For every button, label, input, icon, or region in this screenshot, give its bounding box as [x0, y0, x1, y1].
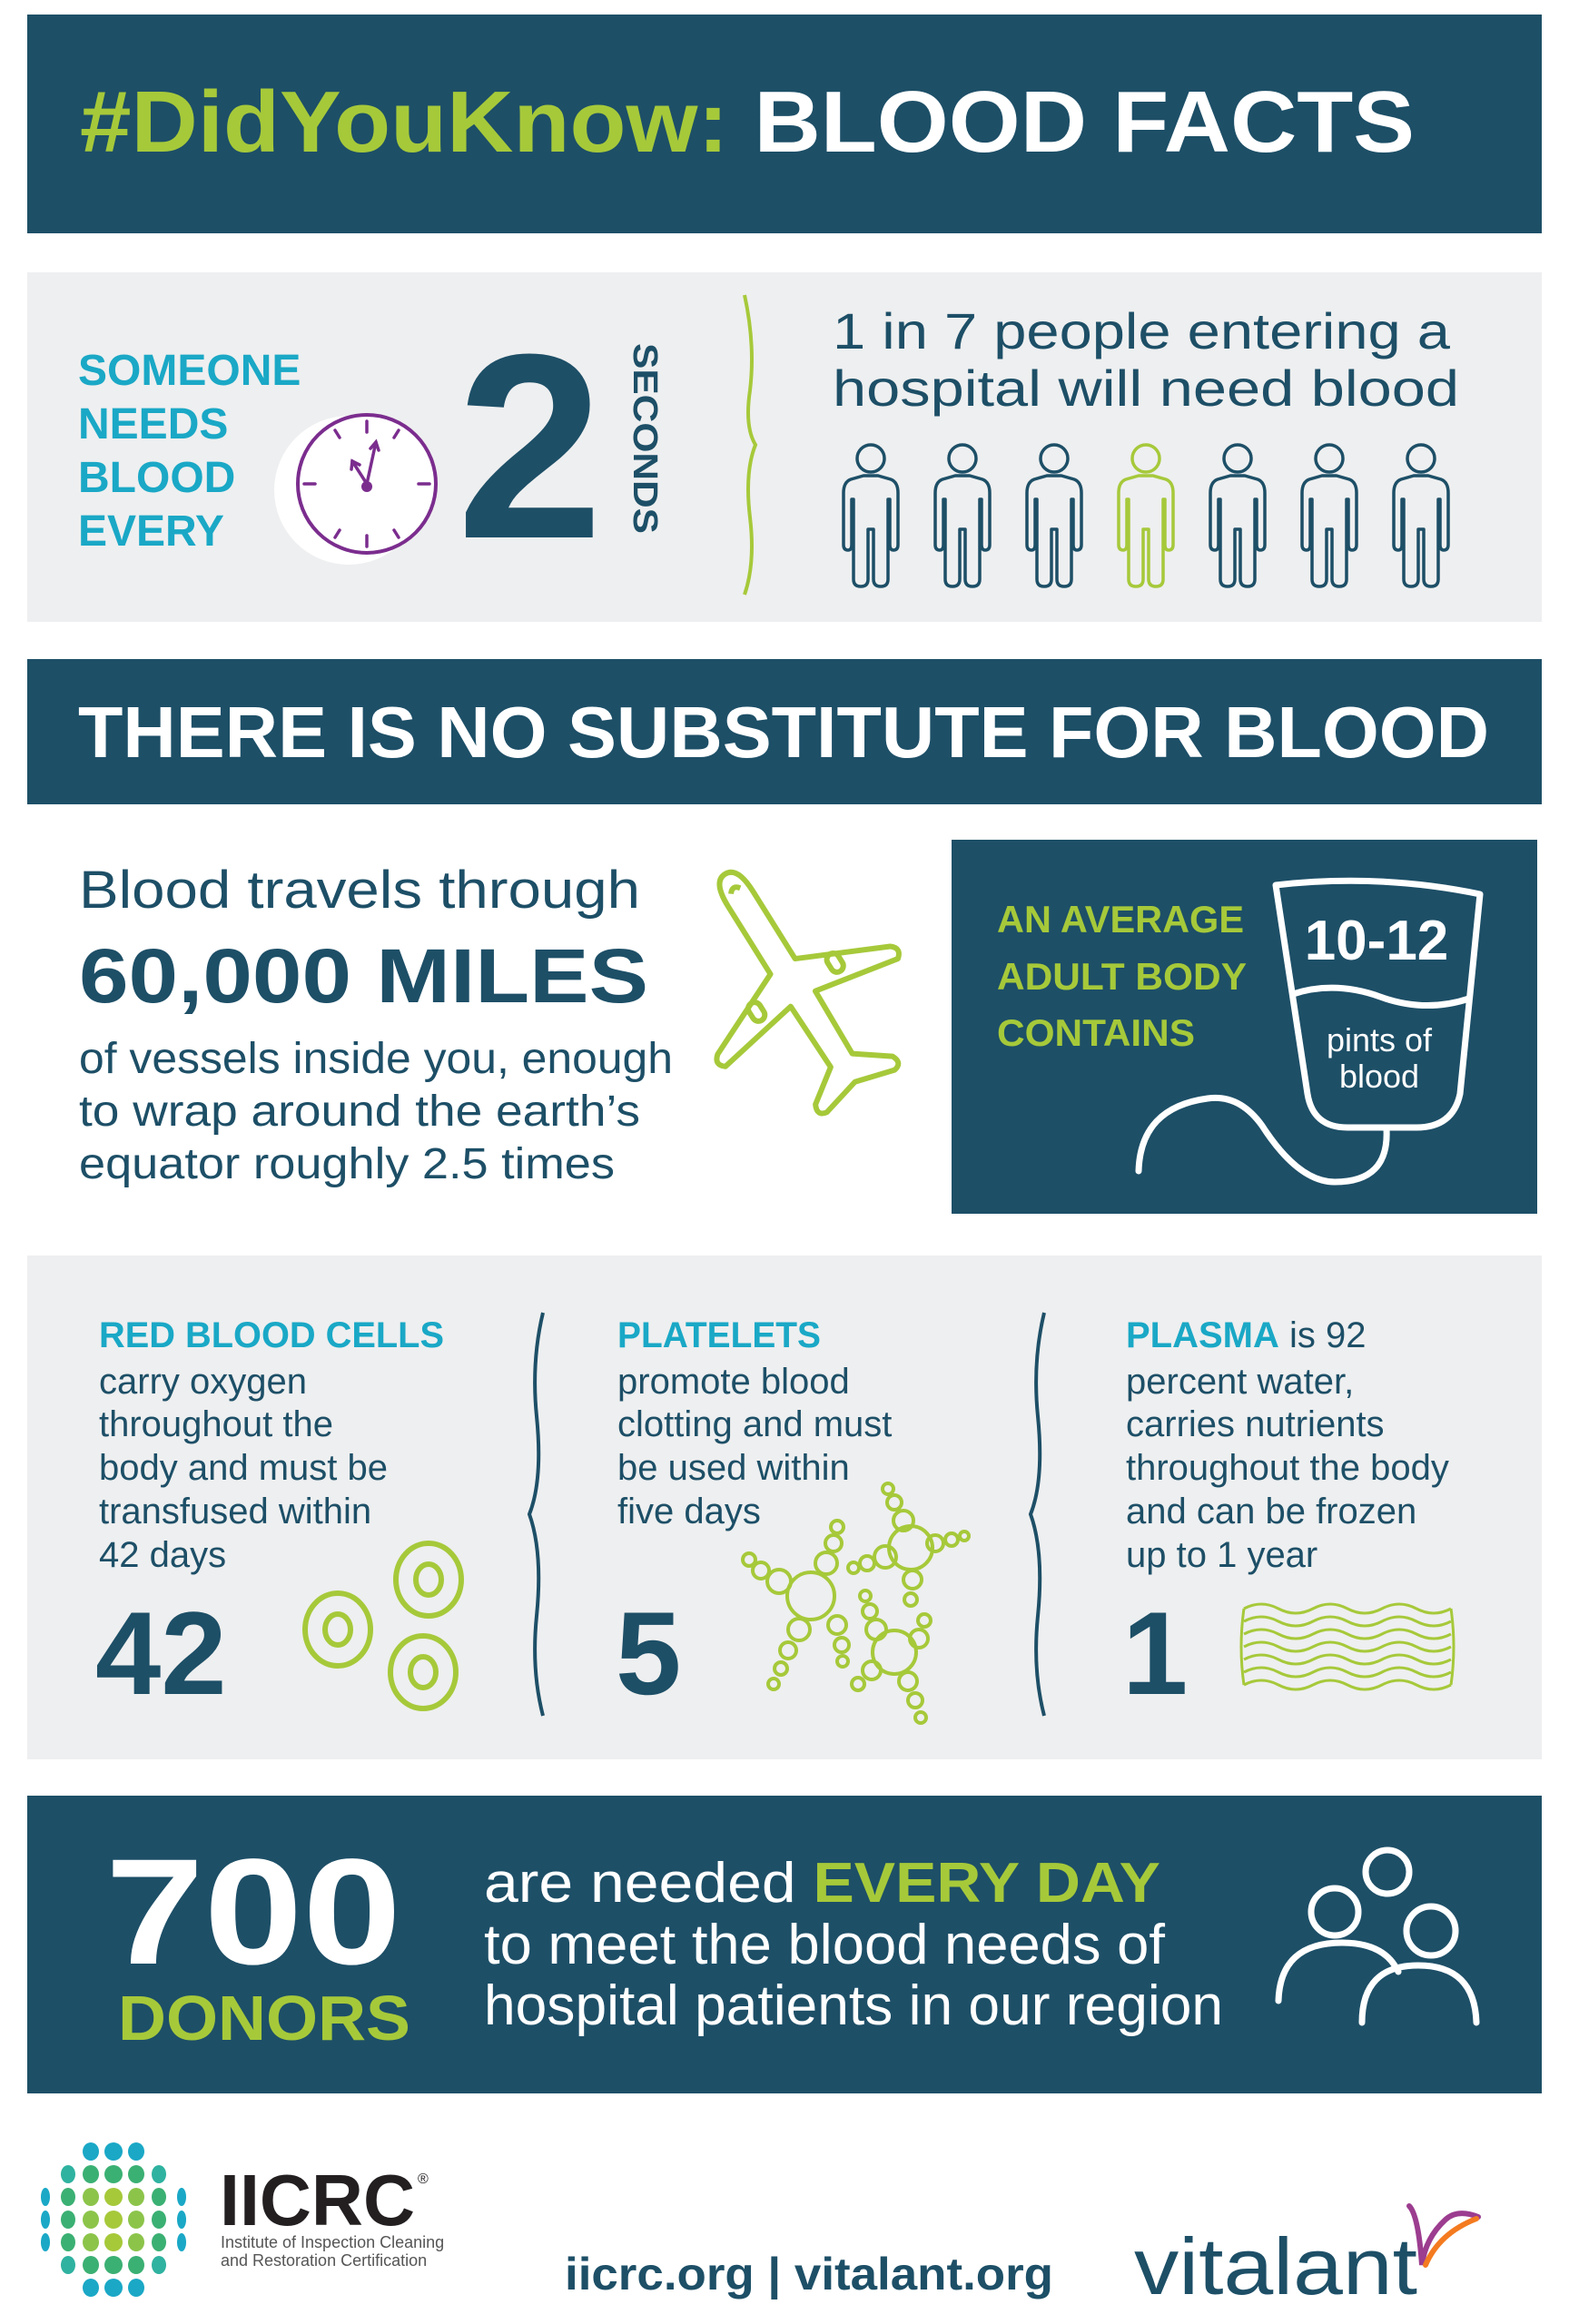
- column: red blood cells: transfused within: [99, 1492, 371, 1531]
- column: red blood cells: 42: [95, 1587, 227, 1719]
- column: plasma: up to 1 year: [1126, 1535, 1317, 1575]
- logo: IICRC: Institute of Inspection Cleaning: [221, 2233, 444, 2251]
- text block: 60,000 miles: Blood travels through: [79, 861, 640, 920]
- panel: average adult body: blood: [1339, 1058, 1419, 1095]
- column: plasma: [1122, 1315, 1454, 1719]
- column: plasma: percent water,: [1126, 1362, 1354, 1402]
- big number 700 donors: 700: [105, 1828, 401, 1996]
- banner: 700 donors: [27, 1796, 1542, 2093]
- icon: airplane: [635, 818, 951, 1147]
- text: an average adult body contains: ADULT BODY: [997, 955, 1247, 998]
- text: 1 in 7 people: [833, 302, 1459, 417]
- text: website links: iicrc.org | vitalant.org: [565, 2249, 1053, 2300]
- text: someone needs blood every: SOMEONE: [78, 347, 301, 395]
- banner: 700 donors: DONORS: [118, 1983, 410, 2053]
- column: red blood cells: 42 days: [99, 1535, 226, 1575]
- text: 10-12 pints of blood: 10-12: [1305, 910, 1448, 972]
- text: someone needs blood every: NEEDS: [78, 400, 228, 448]
- icon: red cells: [305, 1543, 461, 1709]
- icon: globe dots: [41, 2142, 186, 2297]
- divider brace 1: [529, 1313, 543, 1716]
- text: someone needs blood every: BLOOD: [78, 454, 235, 502]
- title banner: [27, 15, 1542, 233]
- logo: vitalant: [1134, 2206, 1478, 2311]
- text block: 60,000 miles: of vessels inside you, enough: [79, 1035, 673, 1083]
- column: plasma: throughout the body: [1126, 1448, 1449, 1488]
- text: someone needs blood every: [78, 347, 301, 556]
- text: IICRC wordmark: IICRC: [220, 2160, 415, 2240]
- column: platelets: [616, 1315, 969, 1723]
- big number 2: 2: [457, 300, 603, 594]
- column: red blood cells: carry oxygen: [99, 1362, 307, 1402]
- text: are needed every day: hospital patients in our region: [484, 1974, 1223, 2037]
- column: plasma: PLASMA is 92: [1126, 1315, 1366, 1355]
- text block: 60,000 miles: to wrap around the earth’s: [79, 1088, 640, 1136]
- icon: group of people: [1278, 1850, 1476, 2023]
- icon: seven people: [844, 445, 1448, 586]
- text: an average adult body contains: AN AVERAGE: [997, 898, 1244, 940]
- divider: green brace: [745, 295, 755, 595]
- icon: platelets: [743, 1483, 969, 1723]
- text block: 60,000 miles: equator roughly 2.5 times: [79, 1140, 615, 1188]
- column: plasma: carries nutrients: [1126, 1404, 1385, 1444]
- column: red blood cells: body and must be: [99, 1448, 388, 1488]
- column: red blood cells: RED BLOOD CELLS: [99, 1315, 444, 1355]
- text: an average adult body contains: CONTAINS: [997, 1011, 1195, 1054]
- logo: IICRC: [41, 2142, 444, 2297]
- title text: #DidYouKnow: BLOOD FACTS: [80, 74, 1415, 171]
- text: 1 in 7 people: 1 in 7 people entering a: [833, 302, 1451, 359]
- column: platelets: be used within: [617, 1448, 850, 1488]
- column: platelets: clotting and must: [617, 1404, 892, 1444]
- column: red blood cells: throughout the: [99, 1404, 333, 1444]
- icon: plasma waves: [1241, 1604, 1454, 1689]
- text: are needed every day: to meet the blood needs of: [484, 1914, 1166, 1976]
- logo: IICRC: ®: [418, 2171, 429, 2187]
- column: plasma: 1: [1122, 1587, 1188, 1719]
- divider brace 2: [1031, 1313, 1044, 1716]
- column: platelets: PLATELETS: [617, 1315, 821, 1355]
- logo: vitalant: vitalant: [1134, 2221, 1417, 2311]
- text: someone needs blood every: EVERY: [78, 507, 224, 556]
- text: 1 in 7 people: hospital will need blood: [833, 359, 1459, 417]
- column: platelets: promote blood: [617, 1362, 850, 1402]
- icon: blood bag with tube: [1139, 881, 1480, 1182]
- text: are needed every day: are needed EVERY DAY: [484, 1852, 1160, 1915]
- banner text: THERE IS NO SUBSTITUTE FOR BLOOD: [78, 692, 1489, 773]
- panel: average adult body: pints of: [1327, 1021, 1433, 1059]
- column: plasma: and can be frozen: [1126, 1492, 1416, 1531]
- text: an average adult body contains: [997, 898, 1247, 1054]
- panel: blood components: [27, 1256, 1542, 1759]
- text block: 60,000 miles: 60,000 MILES: [79, 933, 648, 1019]
- panel: average adult body: [952, 840, 1537, 1214]
- text: seconds vertical: SECONDS: [626, 343, 664, 534]
- logo: IICRC: and Restoration Certification: [221, 2251, 427, 2270]
- column: platelets: five days: [617, 1492, 761, 1531]
- banner: no substitute: [27, 659, 1542, 804]
- text: are needed every day: [484, 1852, 1223, 2037]
- panel: every 2 seconds / 1 in 7: [27, 272, 1542, 622]
- text block: 60,000 miles: [79, 861, 673, 1188]
- column: platelets: 5: [616, 1587, 681, 1719]
- icon: clock: [274, 415, 436, 565]
- column: red blood cells: [95, 1315, 461, 1719]
